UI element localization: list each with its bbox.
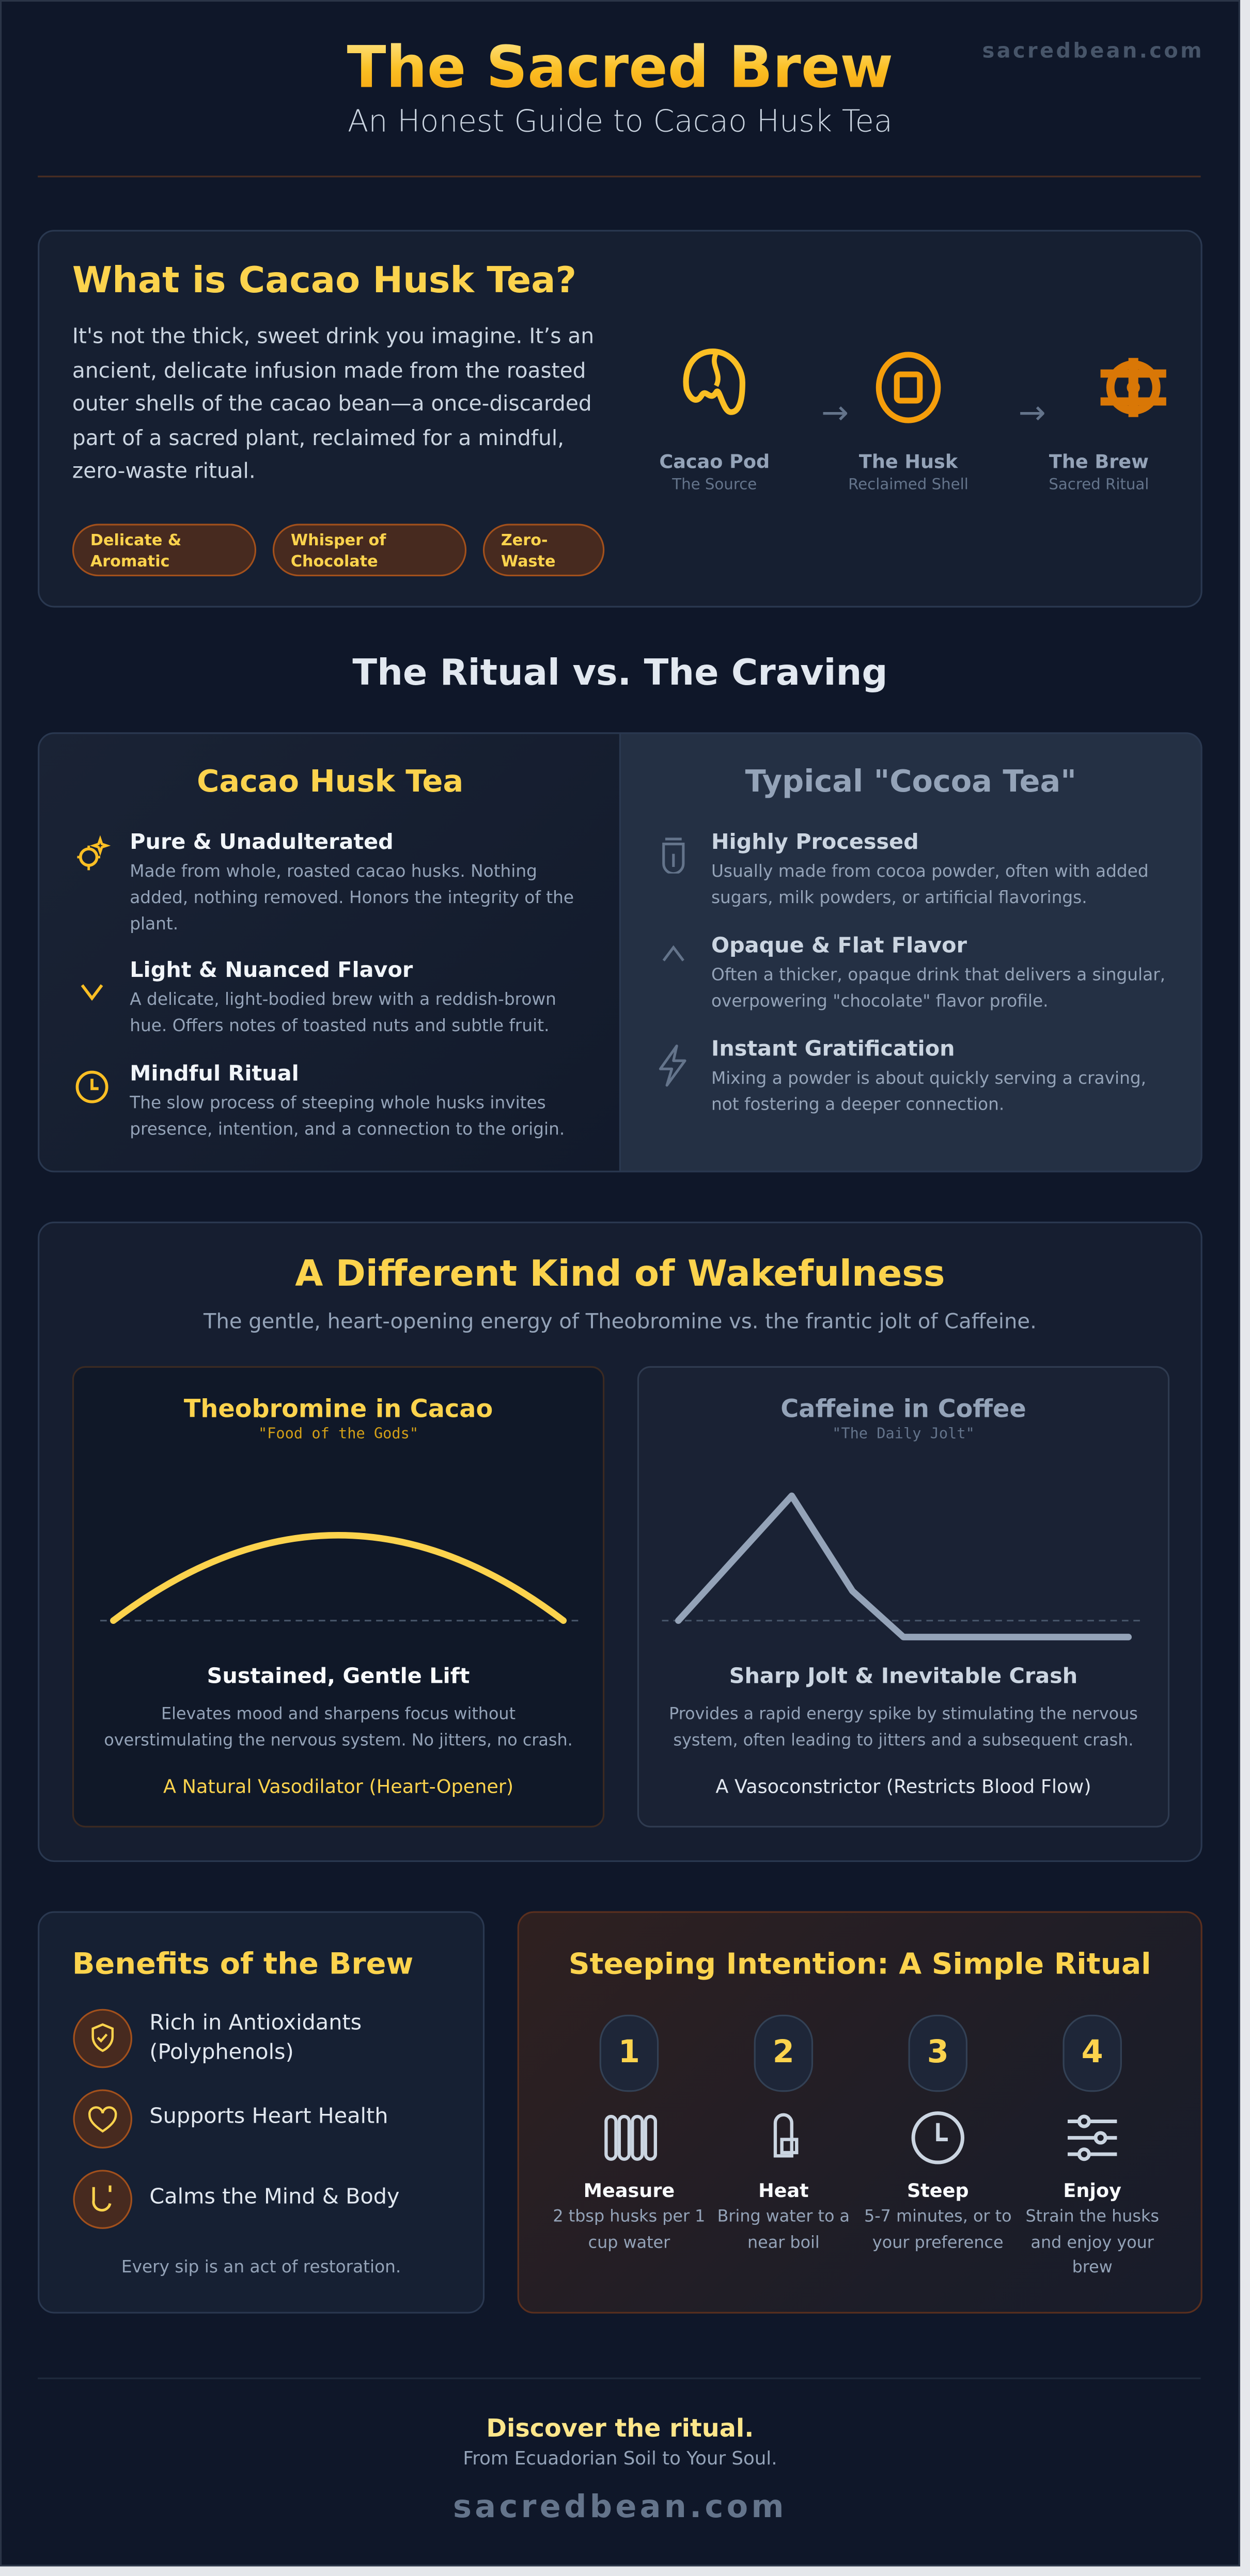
benefit: heart: Supports Heart Health xyxy=(149,2105,388,2129)
arrow: → xyxy=(1019,392,1046,432)
process flow: Reclaimed Shell xyxy=(848,476,968,494)
item: light xyxy=(81,959,556,1036)
labels: Cacao Pod xyxy=(659,450,770,473)
item: opaque: Often a thicker, opaque drink that delivers a singular, overpowering "chocolate" flavor profile. xyxy=(711,966,1165,1012)
step 3 xyxy=(864,2015,1012,2252)
process flow: Sacred Ritual xyxy=(1049,476,1149,494)
card: theobromine: A Natural Vasodilator (Heart-Opener) xyxy=(163,1775,513,1798)
process flow xyxy=(659,349,1166,494)
step 3: 5-7 minutes, or to your preference xyxy=(864,2208,1012,2252)
card: theobromine xyxy=(72,1366,604,1827)
card: caffeine: Provides a rapid energy spike by stimulating the nervous xyxy=(669,1706,1138,1724)
footer xyxy=(0,2414,1240,2545)
icon: jar xyxy=(662,837,685,874)
panel: steeping ritual xyxy=(518,1911,1202,2314)
item: instant: Mixing a powder is about quickly serving a craving, not fostering a deeper connection. xyxy=(711,1069,1146,1115)
tags: Aromatic xyxy=(90,554,170,572)
step 4: 4 xyxy=(1082,2034,1103,2071)
step 2: 2 xyxy=(773,2034,794,2071)
item: opaque: Opaque & Flat Flavor xyxy=(711,934,967,959)
icon: cacao pod xyxy=(683,349,745,415)
item: opaque xyxy=(662,934,1165,1012)
step 2: Heat xyxy=(758,2179,809,2202)
item: mindful: The slow process of steeping whole husks invites presence, intention, and a connection to the origin. xyxy=(130,1094,565,1140)
item: processed: Highly Processed xyxy=(711,831,919,856)
step 1: 1 xyxy=(618,2034,640,2071)
step 3: Steep xyxy=(907,2179,969,2202)
description: It's not the thick, sweet drink you imagine. It’s an ancient, delicate infusion made from the roasted outer shells of the cacao bean—a once-discarded part of a sacred plant, reclaimed for a mindful, zero-waste ritual. xyxy=(72,325,594,484)
step 4: Enjoy xyxy=(1063,2179,1121,2202)
panel: wakefulness xyxy=(38,1222,1202,1862)
step 4: Strain the husks and enjoy your brew xyxy=(1025,2208,1159,2278)
card: theobromine: Sustained, Gentle Lift xyxy=(207,1665,470,1689)
card: theobromine: Theobromine in Cacao xyxy=(184,1394,493,1424)
item: mindful: Mindful Ritual xyxy=(130,1062,299,1087)
chart: gentle curve xyxy=(100,1532,579,1624)
step 2 xyxy=(717,2015,850,2252)
tags xyxy=(72,524,604,576)
heading: What is Cacao Husk Tea? xyxy=(72,261,576,302)
step 3: 3 xyxy=(927,2034,949,2071)
footer: From Ecuadorian Soil to Your Soul. xyxy=(463,2448,777,2470)
column: cacao husk tea: Cacao Husk Tea xyxy=(197,765,463,800)
subtitle: An Honest Guide to Cacao Husk Tea xyxy=(348,105,893,139)
item: mindful xyxy=(75,1062,565,1140)
step 1: Measure xyxy=(584,2179,675,2202)
item: processed xyxy=(662,831,1149,908)
brand top right: sacredbean.com xyxy=(982,38,1204,62)
benefit: heart xyxy=(73,2089,388,2148)
step 1: 2 tbsp husks per 1 cup water xyxy=(553,2208,705,2252)
panel: steeping ritual: Steeping Intention: A Simple Ritual xyxy=(569,1947,1151,1982)
item: pure: Made from whole, roasted cacao husks. Nothing added, nothing removed. Honors the integrity of the plant. xyxy=(130,862,574,934)
card: caffeine: Sharp Jolt & Inevitable Crash xyxy=(729,1665,1077,1689)
item: pure: Pure & Unadulterated xyxy=(130,831,394,856)
benefit: calm: Calms the Mind & Body xyxy=(149,2186,399,2210)
card: theobromine: "Food of the Gods" xyxy=(258,1427,418,1443)
benefit: antioxidants xyxy=(73,2009,362,2068)
process flow: The Brew xyxy=(1049,450,1149,473)
panel: what is cacao husk tea xyxy=(38,230,1202,608)
icon: husk xyxy=(876,352,941,423)
item: instant: Instant Gratification xyxy=(711,1038,955,1062)
tags: Delicate & xyxy=(90,532,181,550)
benefit: antioxidants: (Polyphenols) xyxy=(149,2041,294,2065)
step 2: Bring water to a near boil xyxy=(717,2208,850,2252)
subheading: The gentle, heart-opening energy of Theobromine vs. the frantic jolt of Caffeine. xyxy=(204,1308,1037,1333)
icon: brew xyxy=(1100,358,1166,417)
section heading: ritual vs craving: The Ritual vs. The Craving xyxy=(352,654,887,694)
column: typical cocoa tea: Typical "Cocoa Tea" xyxy=(745,765,1076,800)
card: theobromine: overstimulating the nervous system. No jitters, no crash. xyxy=(104,1731,573,1749)
tags: Chocolate xyxy=(291,554,378,572)
card: caffeine xyxy=(637,1366,1169,1827)
benefits footer: Every sip is an act of restoration. xyxy=(121,2257,401,2278)
panel: comparison xyxy=(38,732,1202,1173)
item: instant xyxy=(659,1038,1146,1115)
labels: The Source xyxy=(672,476,757,494)
arrow: → xyxy=(821,392,849,432)
column: cacao husk tea xyxy=(39,734,621,1171)
process flow: The Husk xyxy=(859,450,958,473)
card: caffeine: Caffeine in Coffee xyxy=(780,1394,1026,1424)
step 4 xyxy=(1025,2015,1159,2278)
panel: benefits xyxy=(38,1911,485,2314)
item: processed: Usually made from cocoa powder, often with added sugars, milk powders, or artificial flavorings. xyxy=(711,862,1149,908)
tags: Whisper of xyxy=(291,532,386,550)
benefit: calm xyxy=(73,2170,399,2229)
card: caffeine: system, often leading to jitters and a subsequent crash. xyxy=(674,1731,1133,1749)
heading: A Different Kind of Wakefulness xyxy=(295,1255,945,1295)
panel: benefits: Benefits of the Brew xyxy=(72,1947,413,1982)
footer: sacredbean.com xyxy=(453,2489,787,2525)
tags: Waste xyxy=(501,554,555,572)
card: caffeine: A Vasoconstrictor (Restricts Blood Flow) xyxy=(715,1775,1091,1798)
item: light: A delicate, light-bodied brew with a reddish-brown hue. Offers notes of toasted nuts and subtle fruit. xyxy=(130,990,556,1036)
card: theobromine: Elevates mood and sharpens focus without xyxy=(161,1706,515,1724)
step 1 xyxy=(553,2015,705,2252)
item: light: Light & Nuanced Flavor xyxy=(130,959,413,984)
card: caffeine: "The Daily Jolt" xyxy=(832,1427,975,1443)
column: typical cocoa tea xyxy=(659,765,1165,1115)
labels xyxy=(659,450,770,494)
benefit: antioxidants: Rich in Antioxidants xyxy=(149,2012,362,2036)
icon: clock xyxy=(75,1071,108,1103)
title: The Sacred Brew xyxy=(347,36,893,102)
icon: chevron xyxy=(81,984,103,1001)
chart: spike and crash xyxy=(662,1492,1140,1640)
icon: lightning xyxy=(659,1045,686,1086)
icon: sparkle xyxy=(77,835,111,871)
icon: caret xyxy=(662,945,684,961)
footer: Discover the ritual. xyxy=(486,2414,754,2443)
item: pure xyxy=(77,831,574,934)
tags: Zero- xyxy=(501,532,548,550)
